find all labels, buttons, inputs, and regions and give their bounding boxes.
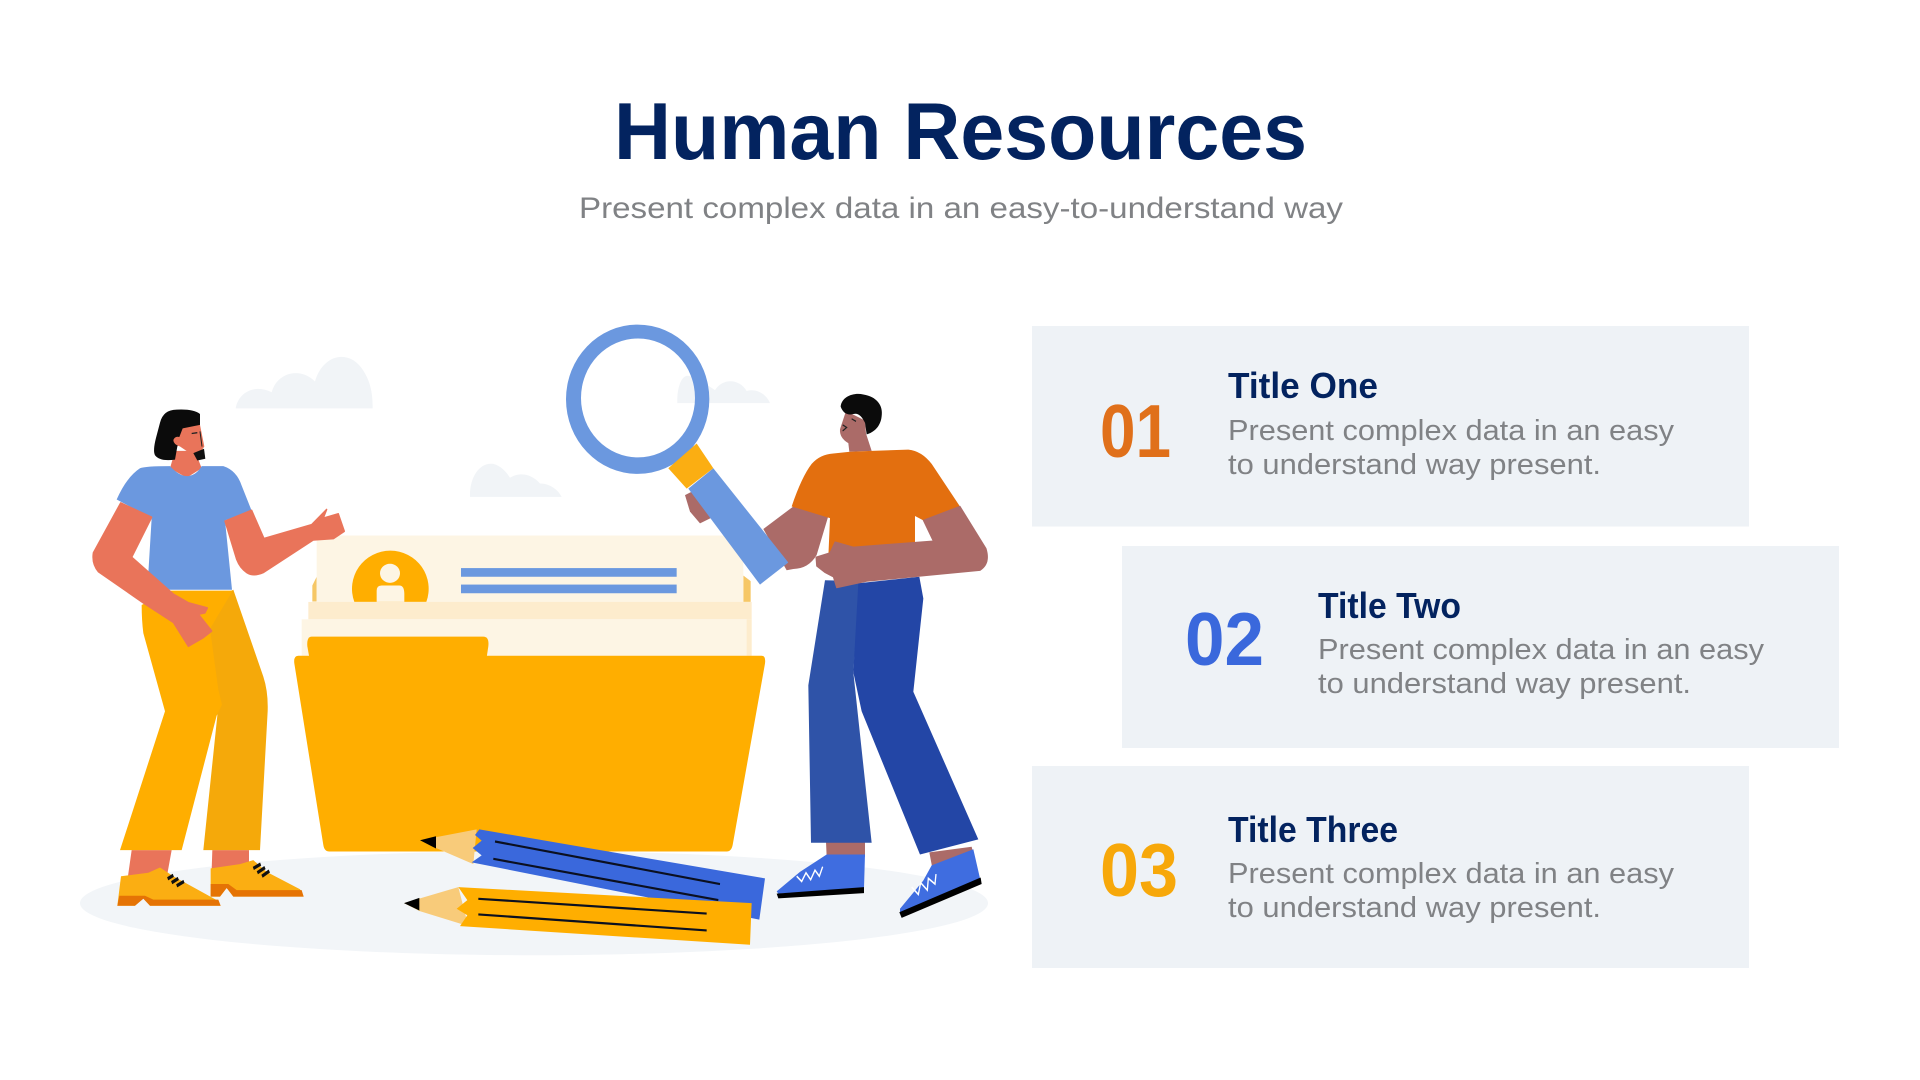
neck [170,451,202,478]
shoes [117,860,304,906]
shirt [117,466,252,590]
panel: item 02 [1122,546,1839,748]
body text: Present complex data in an easy [1318,634,1765,666]
pencil: yellow [404,887,752,945]
magnifier handle [688,468,788,585]
heading: Title One: Title One [1228,365,1378,406]
face [173,425,204,455]
front arm [816,506,987,588]
panel: item 01 [1032,326,1749,526]
shirt [792,450,960,557]
woman figure [93,410,344,906]
body text: to understand way present. [1228,892,1601,924]
document text lines [461,568,677,593]
magnifying glass lens [566,325,709,474]
ground shadow [80,851,988,955]
hair [154,410,200,460]
body text: to understand way present. [1318,668,1691,700]
number 01: 01 [1100,389,1171,473]
body text [1228,858,1675,924]
body text [1228,415,1675,481]
heading: Title Three: Title Three [1228,809,1398,850]
body text [1318,634,1765,700]
ankles [826,842,975,870]
profile avatar icon [352,551,429,602]
trousers [808,580,872,843]
hair [841,394,882,434]
folder front [294,656,765,851]
folder with documents [294,536,765,851]
number 03: 03 [1100,828,1178,912]
arms [93,503,212,646]
neck and head [840,411,872,452]
sneakers [777,849,982,918]
hand on handle [685,490,711,523]
clouds [236,357,770,497]
back arm [763,506,828,570]
folder back tab [307,637,488,657]
ankles [128,850,249,878]
document inside tabs [312,575,751,602]
man figure [566,325,987,918]
pencil: blue [420,829,765,920]
magnifier collar [668,444,713,489]
heading: Title Two: Title Two [1318,585,1461,626]
title: Human Resources [614,87,1307,177]
panel: item 03 [1032,766,1749,968]
trousers [203,590,268,850]
body text: Present complex data in an easy [1228,858,1675,890]
body text: to understand way present. [1228,449,1601,481]
subtitle: Present complex data in an easy-to-understand way [579,192,1343,225]
illustration: HR file search [80,325,988,955]
number 02: 02 [1185,597,1264,681]
body text: Present complex data in an easy [1228,415,1675,447]
